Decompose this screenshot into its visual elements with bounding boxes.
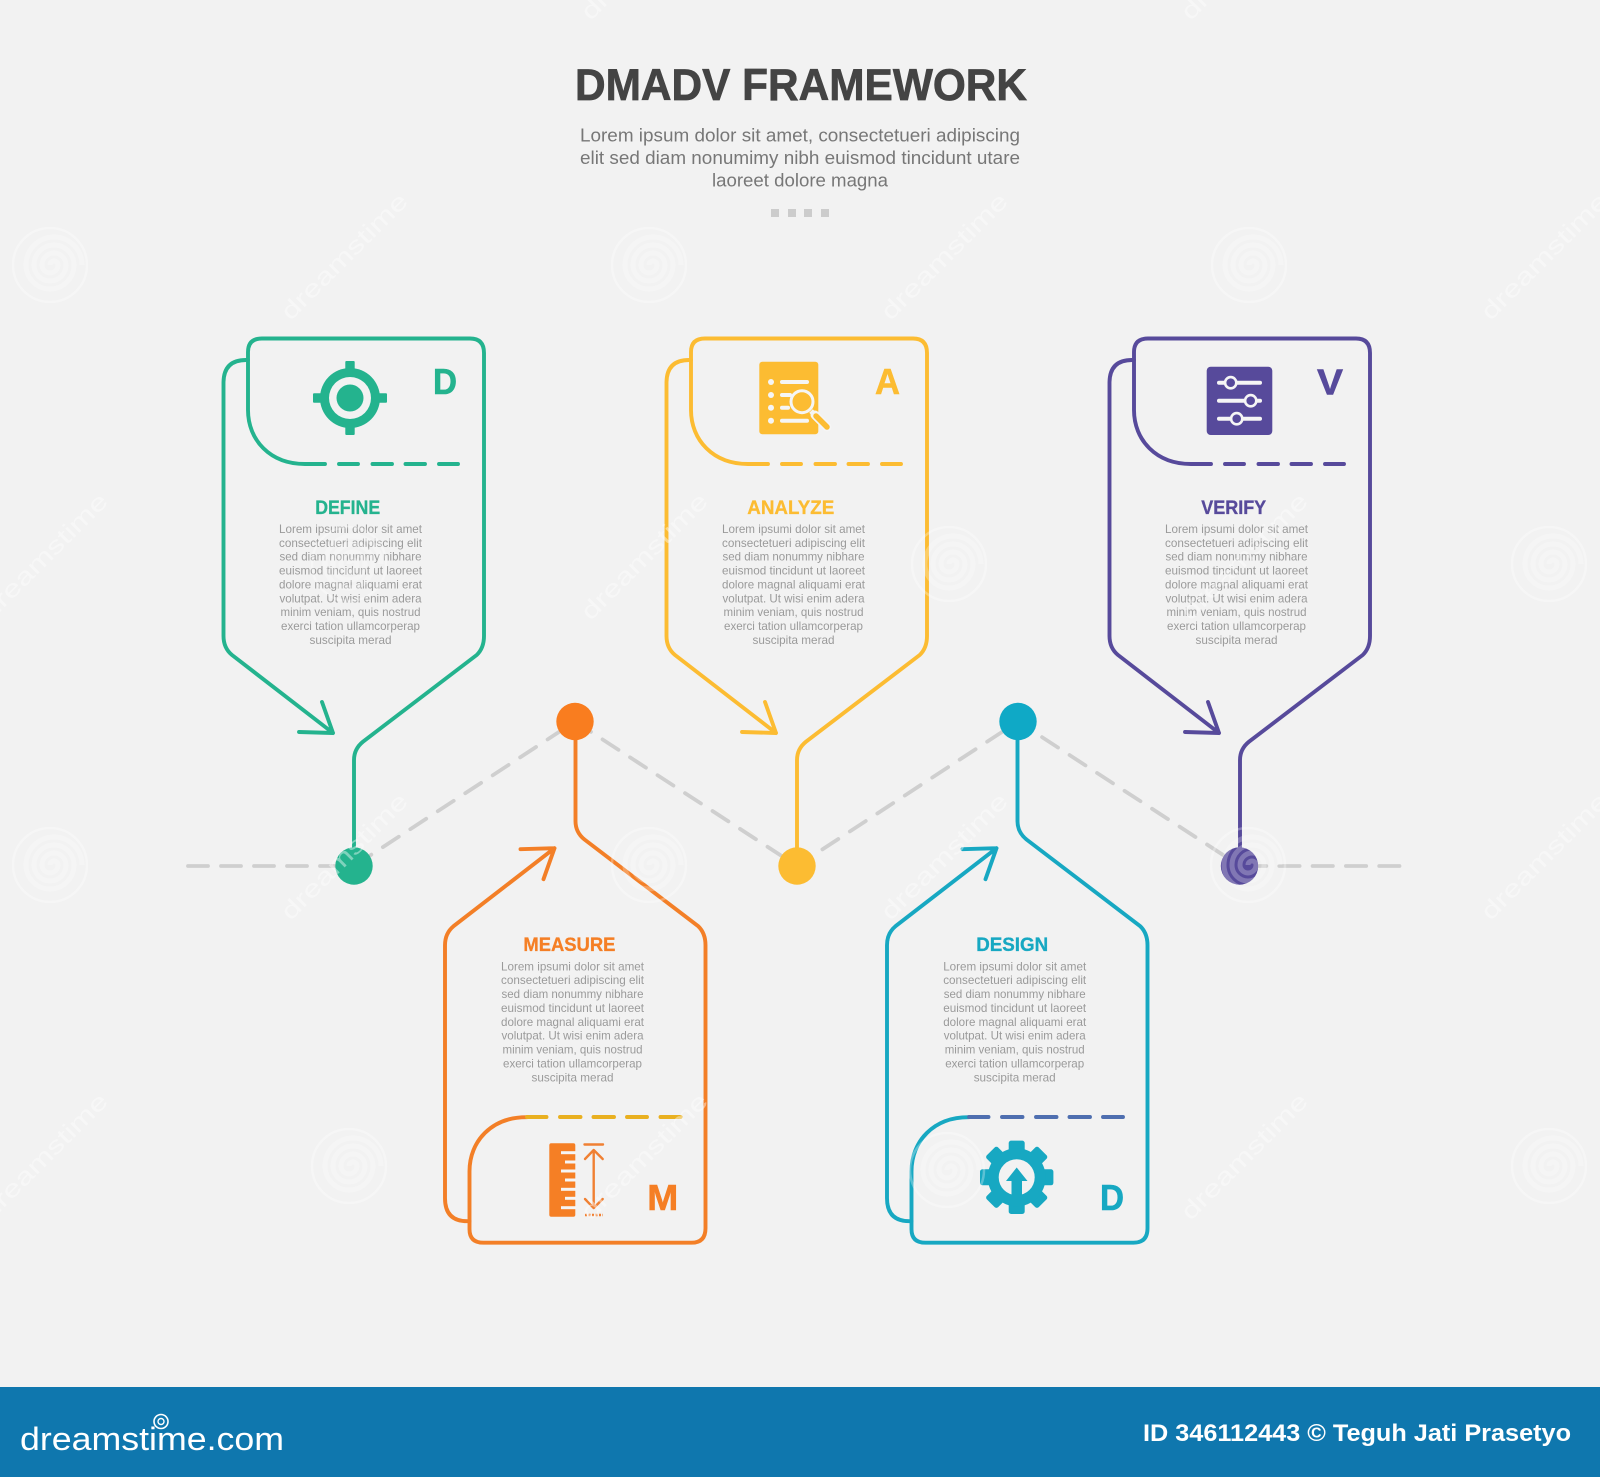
text block: analyze: sed diam nonummy nibhare (722, 550, 865, 564)
text block: measure (501, 959, 645, 1084)
text block: define (279, 522, 423, 647)
text block: measure: minim veniam, quis nostrud (502, 1042, 642, 1056)
text block: analyze: exerci tation ullamcorperap (724, 619, 863, 633)
watermark overlay: dreamstime (1476, 788, 1600, 926)
icon: document with magnifier (759, 362, 827, 434)
text block: analyze: dolore magnal aliquami erat (722, 578, 866, 592)
text block: define: Lorem ipsumi dolor sit amet (279, 522, 423, 536)
watermark overlay: dreamstime (876, 188, 1014, 326)
text block: verify: euismod tincidunt ut laoreet (1165, 564, 1309, 578)
text block: verify: exerci tation ullamcorperap (1167, 619, 1306, 633)
panel: verify (1110, 338, 1370, 885)
card outline: verify (1110, 338, 1370, 866)
dashed divider: measure (527, 1115, 680, 1119)
text block: measure: euismod tincidunt ut laoreet (501, 1001, 645, 1015)
panel: analyze (666, 338, 927, 885)
text block: verify: volutpat. Ut wisi enim adera (1166, 591, 1308, 605)
text block: analyze: minim veniam, quis nostrud (724, 605, 864, 619)
panel: measure (445, 703, 706, 1243)
text block: measure: sed diam nonummy nibhare (502, 987, 644, 1001)
text block: analyze: Lorem ipsumi dolor sit amet (722, 522, 866, 536)
node: verify (1221, 847, 1258, 885)
letter D: D (433, 361, 457, 402)
text block: design: suscipita merad (974, 1070, 1056, 1084)
text block: define: minim veniam, quis nostrud (280, 605, 420, 619)
text block: verify: suscipita merad (1196, 633, 1278, 647)
text block: define: volutpat. Ut wisi enim adera (280, 591, 422, 605)
heading: define: DEFINE (315, 498, 380, 519)
text block: measure: volutpat. Ut wisi enim adera (502, 1029, 644, 1043)
letter A: A (875, 361, 900, 402)
icon: sliders (1207, 367, 1272, 435)
text block: analyze: consectetueri adipiscing elit (722, 536, 866, 550)
heading: measure: MEASURE (523, 935, 615, 956)
card outline: analyze (666, 338, 927, 866)
text block: analyze: suscipita merad (752, 633, 834, 647)
watermark overlay: dreamstime (276, 788, 414, 926)
watermark overlay: dreamstime (1176, 1088, 1314, 1226)
card outline: define (224, 338, 484, 866)
dashed timeline zigzag (188, 722, 1400, 866)
watermark overlay: dreamstime (576, 1088, 714, 1226)
footer logo: dreamstime.com (20, 1421, 284, 1457)
text block: define: exerci tation ullamcorperap (281, 619, 420, 633)
letter D: D (1100, 1177, 1124, 1218)
text block: design (943, 959, 1087, 1084)
text block: measure: exerci tation ullamcorperap (503, 1056, 642, 1070)
text block: measure: consectetueri adipiscing elit (501, 973, 645, 987)
icon: target (313, 361, 387, 435)
text block: measure: dolore magnal aliquami erat (501, 1015, 645, 1029)
text block: design: Lorem ipsumi dolor sit amet (943, 959, 1087, 973)
letter M: M (647, 1177, 678, 1218)
text block: measure: Lorem ipsumi dolor sit amet (501, 959, 645, 973)
letter V: V (1317, 362, 1343, 402)
text block: verify: consectetueri adipiscing elit (1165, 536, 1309, 550)
subtitle text (580, 124, 1020, 190)
text block: design: volutpat. Ut wisi enim adera (944, 1029, 1086, 1043)
text block: design: sed diam nonummy nibhare (944, 987, 1086, 1001)
node: analyze (778, 847, 816, 885)
text block: analyze (722, 522, 866, 647)
heading: analyze: ANALYZE (747, 498, 834, 519)
text block: measure: suscipita merad (532, 1070, 614, 1084)
text block: verify: minim veniam, quis nostrud (1166, 605, 1306, 619)
watermark overlay: dreamstime (276, 188, 414, 326)
node: measure (556, 703, 594, 740)
footer credit: ID 346112443 © Teguh Jati Prasetyo (1143, 1420, 1571, 1447)
watermark overlay: dreamstime (876, 788, 1014, 926)
text block: verify: sed diam nonummy nibhare (1166, 550, 1308, 564)
text block: analyze: volutpat. Ut wisi enim adera (722, 591, 865, 605)
subtitle text: Lorem ipsum dolor sit amet, consectetueri adipiscing (580, 124, 1020, 146)
text block: define: sed diam nonummy nibhare (280, 550, 422, 564)
card outline: measure (445, 715, 706, 1243)
icon: ruler with height arrow (549, 1143, 603, 1217)
card outline: design (887, 715, 1148, 1243)
node: design (999, 703, 1037, 740)
text block: design: consectetueri adipiscing elit (943, 973, 1087, 987)
text block: verify (1165, 522, 1309, 647)
dashed divider: design (969, 1115, 1123, 1119)
text block: verify: Lorem ipsumi dolor sit amet (1165, 522, 1309, 536)
text block: analyze: euismod tincidunt ut laoreet (722, 564, 866, 578)
watermark overlay: dreamstime (1176, 488, 1314, 626)
title divider dots (771, 209, 829, 217)
text block: design: minim veniam, quis nostrud (945, 1042, 1085, 1056)
title: DMADV FRAMEWORK (575, 61, 1027, 110)
heading: design: DESIGN (976, 935, 1048, 956)
text block: design: dolore magnal aliquami erat (943, 1015, 1087, 1029)
node: define (335, 847, 373, 885)
footer bar (0, 1387, 1600, 1477)
subtitle text: laoreet dolore magna (712, 170, 889, 190)
text block: define: consectetueri adipiscing elit (279, 536, 423, 550)
panel: design (887, 703, 1148, 1243)
text block: design: exerci tation ullamcorperap (945, 1056, 1085, 1070)
text block: define: suscipita merad (310, 633, 392, 647)
subtitle text: elit sed diam nonumimy nibh euismod tincidunt utare (580, 147, 1020, 168)
watermark overlay: dreamstime (1476, 188, 1600, 326)
text block: design: euismod tincidunt ut laoreet (943, 1001, 1087, 1015)
text block: define: dolore magnal aliquami erat (279, 578, 423, 592)
text block: define: euismod tincidunt ut laoreet (279, 564, 423, 578)
heading: verify: VERIFY (1201, 498, 1267, 519)
text block: verify: dolore magnal aliquami erat (1165, 578, 1309, 592)
icon: gear with up arrow (980, 1141, 1053, 1214)
panel: define (224, 338, 484, 885)
watermark overlay: dreamstime (576, 488, 714, 626)
